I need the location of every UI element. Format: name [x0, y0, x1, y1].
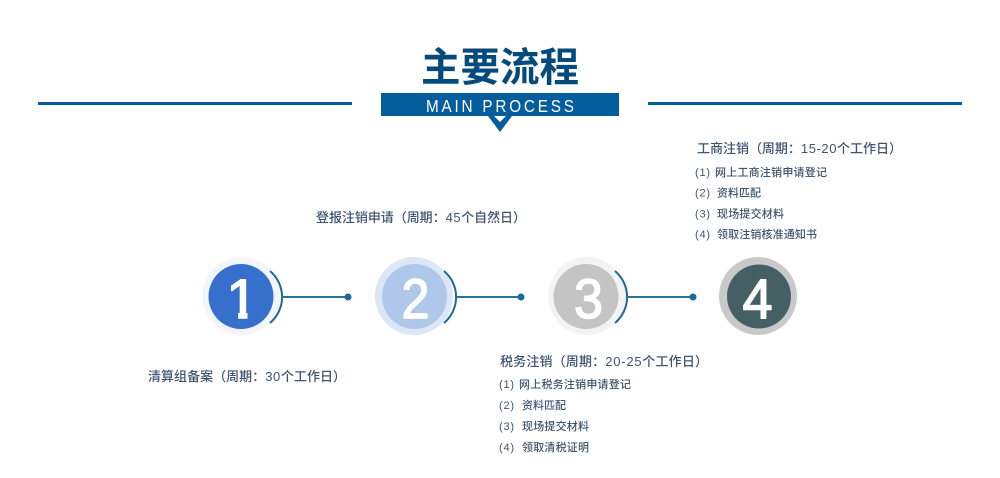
step 4 node: 4	[742, 267, 772, 330]
step 1 node	[202, 257, 352, 335]
step 3 text block: (1)	[499, 379, 515, 391]
step 3 text block: 网上税务注销申请登记	[519, 377, 631, 391]
step 4 text block: 现场提交材料	[717, 206, 784, 220]
step 4 text block: (1)	[695, 167, 711, 179]
subtitle banner	[381, 93, 619, 132]
step 4 text block: (2)	[695, 188, 711, 200]
step 3 text block: (4)	[499, 442, 515, 454]
step 4 node	[719, 257, 797, 335]
step 4 text block: 领取注销核准通知书	[717, 227, 817, 241]
step 3 text block	[499, 354, 708, 454]
step 3 text block: 税务注销（周期：20-25个工作日）	[500, 354, 708, 369]
step 4 text block: 网上工商注销申请登记	[715, 165, 827, 179]
step 3 node	[548, 257, 696, 335]
step 3 text block: 现场提交材料	[522, 419, 589, 433]
step 3 node: 3	[574, 267, 603, 330]
step 4 text block: (4)	[695, 229, 711, 241]
step 2 node	[375, 257, 524, 335]
step 1 label: 清算组备案（周期：30个工作日）	[148, 369, 346, 384]
step 4 text block: (3)	[695, 208, 711, 220]
step 2 label: 登报注销申请（周期：45个自然日）	[316, 210, 526, 225]
step 3 text block: (3)	[499, 421, 515, 433]
title: 主要流程	[421, 46, 579, 90]
step 4 text block: 工商注销（周期：15-20个工作日）	[697, 141, 902, 156]
step 2 node: 2	[402, 267, 430, 330]
header rule left	[38, 102, 352, 105]
step 4 text block	[695, 141, 902, 241]
subtitle banner: MAIN PROCESS	[426, 96, 574, 116]
step 3 text block: (2)	[499, 400, 515, 412]
header rule right	[648, 102, 962, 105]
step 3 text block: 资料匹配	[522, 398, 566, 412]
step 1 node: 1	[226, 267, 258, 330]
step 3 text block: 领取清税证明	[522, 440, 589, 454]
step 4 text block: 资料匹配	[717, 186, 761, 200]
